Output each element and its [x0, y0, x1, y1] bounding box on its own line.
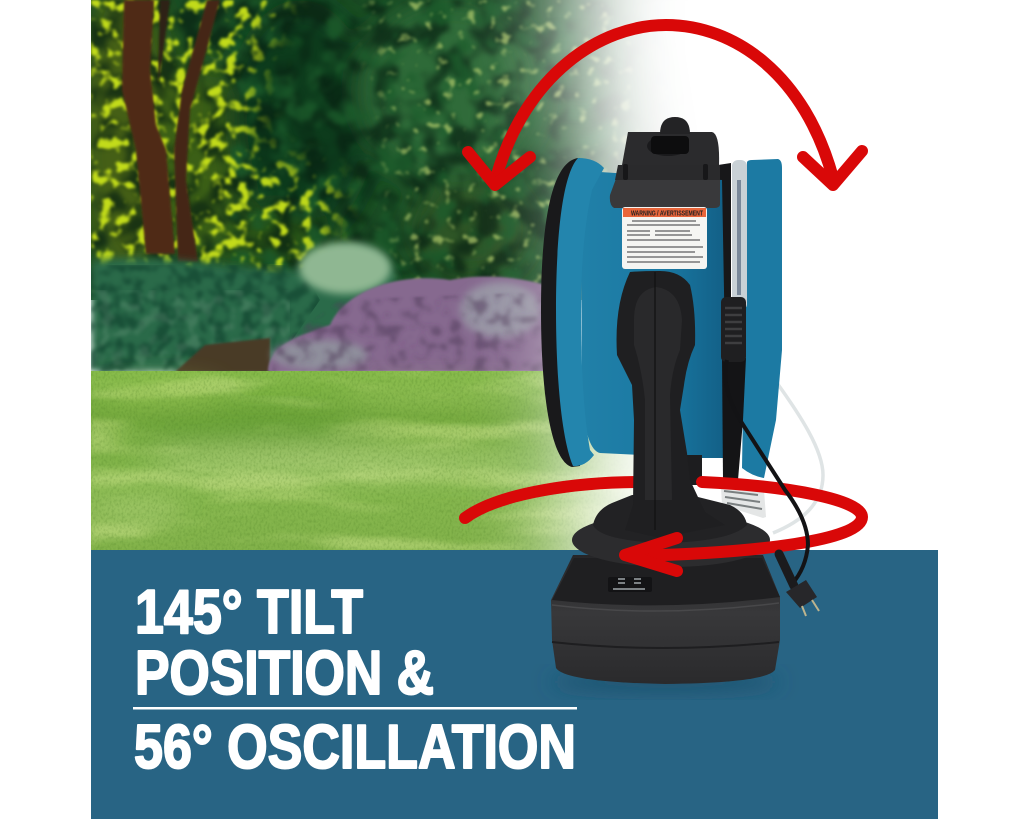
tilt arrow	[468, 25, 862, 185]
soil	[175, 338, 270, 372]
fan base	[551, 271, 780, 684]
neck and handle	[617, 271, 725, 538]
purple flowers	[268, 277, 545, 372]
cable bundle	[722, 358, 746, 480]
power cord and plug	[725, 360, 819, 616]
heading	[133, 578, 577, 782]
foot	[593, 495, 747, 543]
pedestal	[551, 555, 780, 684]
front rim blue	[556, 158, 604, 466]
product: misting fan	[541, 117, 823, 690]
oscillation arrow: upper part behind neck	[465, 482, 640, 518]
control box	[622, 132, 719, 165]
support post	[680, 455, 702, 485]
background photo: garden with lawn, trees and hedge	[91, 0, 662, 550]
foliage	[91, 0, 662, 300]
heading: POSITION &	[135, 639, 434, 708]
control panel	[608, 577, 652, 592]
fan body	[581, 172, 727, 458]
ground shadow	[550, 674, 780, 690]
plug inline connector	[721, 297, 746, 362]
warning label: WARNING / AVERTISSEMENT	[631, 210, 704, 218]
fade to white	[481, 0, 735, 550]
tree trunks	[122, 0, 220, 262]
oscillation arrow: right part and head	[625, 482, 862, 571]
turntable disc	[572, 513, 770, 567]
front rim black	[541, 158, 580, 467]
blue text band	[91, 550, 938, 819]
tube coil	[718, 163, 731, 360]
heading: 145° TILT	[135, 578, 363, 647]
green hedge	[91, 242, 398, 372]
warning label	[622, 207, 707, 269]
water tube	[773, 383, 823, 533]
rear shroud	[742, 159, 782, 478]
knob	[660, 117, 690, 134]
lawn	[91, 368, 634, 550]
tag sticker	[721, 487, 766, 518]
heading: 56° OSCILLATION	[134, 713, 576, 782]
